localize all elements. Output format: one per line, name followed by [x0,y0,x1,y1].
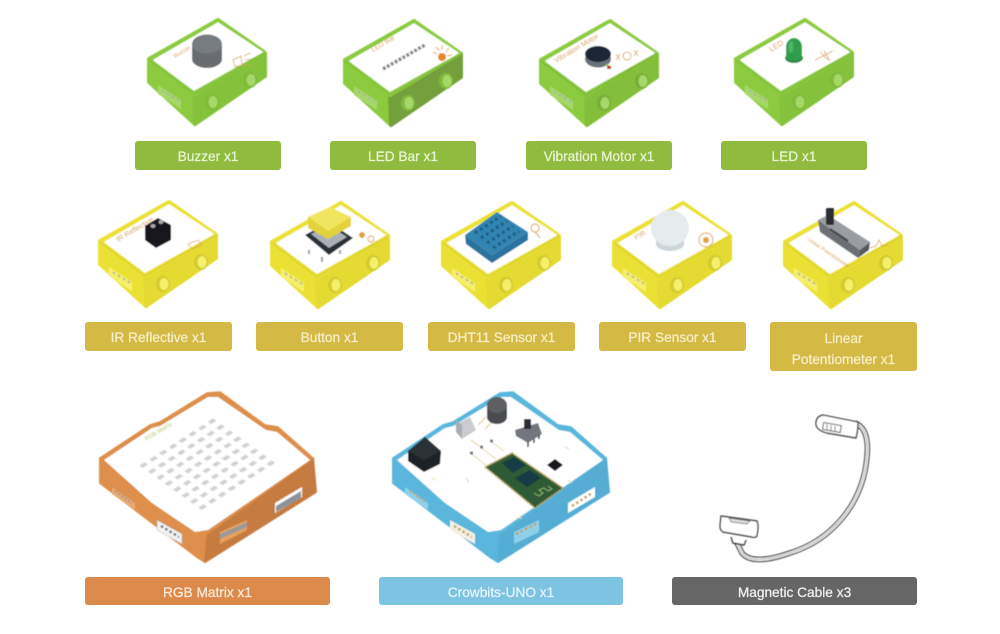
slide switch [515,419,542,447]
Button label: Button x1 [301,330,358,345]
Crowbits-UNO label [379,577,623,605]
module: Button [256,203,403,351]
LED Bar module illustration [345,21,461,125]
module: PIR Sensor [599,203,746,351]
module: DHT11 Sensor [428,203,575,351]
LED module illustration [736,20,852,124]
DHT11 Sensor label [428,322,575,351]
RGB Matrix label [85,577,330,605]
Buzzer module illustration [149,20,265,124]
Magnetic Cable label [672,577,917,605]
DHT11 Sensor module illustration [443,203,559,307]
IR Reflective module illustration [100,202,216,306]
DHT11 Sensor label: DHT11 Sensor x1 [448,330,555,345]
module: Magnetic Cable [672,415,917,605]
IR Reflective module illustration: IR Reflective [114,215,155,244]
Crowbits-UNO module illustration [393,392,609,562]
Linear Potentiometer module illustration: Linear Potentiometer [806,237,850,270]
module: Vibration Motor [526,21,672,170]
Bluetooth PCB [485,453,563,508]
top connector [816,415,858,438]
PIR Sensor label [599,322,746,351]
RGB Matrix module illustration: RGB Matrix [144,422,173,443]
Linear Potentiometer label [770,322,917,371]
Linear Potentiometer label: Potentiometer x1 [792,352,895,367]
bottom connector [720,516,758,545]
magnetic cable illustration [720,415,867,559]
LED Bar module illustration: LED Bar [370,34,397,54]
module: Linear Potentiometer [770,203,917,371]
USB connector [455,417,476,439]
black switch block [408,437,441,472]
module: RGB Matrix [85,392,330,605]
IR Reflective label: IR Reflective x1 [111,330,206,345]
cable wire [736,423,867,559]
Buzzer label: Buzzer x1 [178,149,238,164]
module: LED Bar [330,21,476,170]
PIR Sensor label: PIR Sensor x1 [628,330,717,345]
Vibration Motor module illustration [541,21,657,125]
Linear Potentiometer module illustration [785,203,901,307]
Button label [256,322,403,351]
Buzzer label [135,141,281,170]
PIR Sensor module illustration: PIR [633,230,647,242]
LED Bar label: LED Bar x1 [368,149,438,164]
LED label [721,141,867,170]
round button [487,397,507,424]
LED module illustration: LED [767,38,785,54]
chip [547,459,563,471]
module: Buzzer [135,20,281,170]
module: IR Reflective [85,202,232,351]
Vibration Motor label: Vibration Motor x1 [544,149,654,164]
PIR Sensor module illustration [614,203,730,307]
IR Reflective label [85,322,232,351]
LED Bar label [330,141,476,170]
Linear Potentiometer label: Linear [824,331,863,346]
LED label: LED x1 [772,149,816,164]
module: LED [721,20,867,170]
Magnetic Cable label: Magnetic Cable x3 [738,585,852,600]
RGB Matrix module illustration [100,392,316,562]
RGB Matrix label: RGB Matrix x1 [163,585,252,600]
Crowbits-UNO label: Crowbits-UNO x1 [448,585,554,600]
module: Crowbits-UNO [379,392,623,605]
Button module illustration [272,203,388,307]
Vibration Motor module illustration: Vibration Motor [552,31,600,65]
LED grid [135,415,280,513]
Vibration Motor label [526,141,672,170]
Buzzer module illustration: Buzzer [173,45,192,60]
